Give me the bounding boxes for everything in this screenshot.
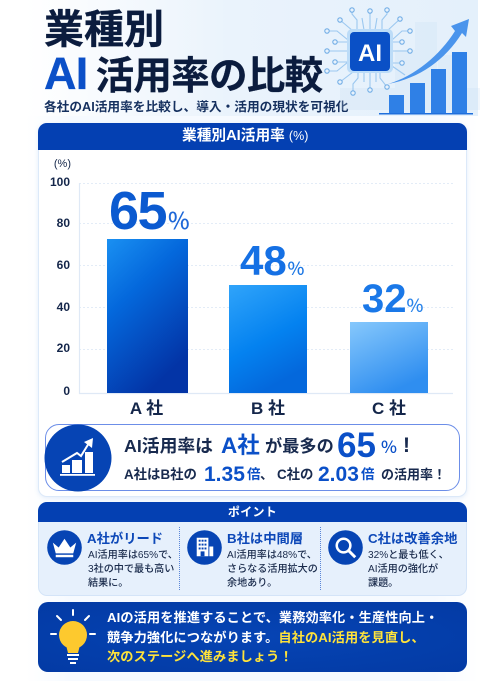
callout detail: 、 <box>260 467 273 482</box>
bar: C社 <box>350 277 428 418</box>
panel: conclusion banner <box>38 602 467 672</box>
callout headline <box>124 426 410 465</box>
y axis labels: 60 <box>57 258 70 272</box>
icon: crown <box>47 530 82 565</box>
callout detail: A社はB社の <box>124 467 197 482</box>
point: C社は改善余地: AI活用の強化が <box>368 564 438 575</box>
title <box>44 8 323 99</box>
point: C社は改善余地: 32%と最も低く、 <box>368 550 449 561</box>
callout headline: % <box>381 433 397 458</box>
bar: B社: B 社 <box>251 399 285 418</box>
icon: building <box>187 530 222 565</box>
conclusion text <box>107 610 438 664</box>
y axis labels: 100 <box>50 175 70 189</box>
icon: AI chip and rising bars: AI <box>358 40 382 67</box>
point: B社は中間層: さらなる活用拡大の <box>227 564 318 575</box>
bar chart <box>50 158 453 418</box>
chart heading: 業種別AI活用率 (%) <box>182 128 308 144</box>
icon: light bulb <box>50 609 96 664</box>
callout detail: 倍 <box>361 467 374 482</box>
point: B社は中間層: 余地あり。 <box>227 578 277 589</box>
chart heading <box>38 123 467 150</box>
callout headline: A社 <box>221 433 260 458</box>
header band <box>26 0 478 116</box>
point: C社は改善余地 <box>328 530 458 589</box>
icon: magnifier <box>328 530 363 565</box>
point: A社がリード: 結果に。 <box>88 578 128 589</box>
callout headline: ! <box>403 434 410 457</box>
callout detail: 倍 <box>247 467 260 482</box>
callout detail <box>124 463 446 486</box>
callout detail: 1.35 <box>204 463 245 486</box>
bar: A社: % <box>168 202 190 236</box>
bar: A社 <box>107 181 190 418</box>
conclusion text: 次のステージへ進みましょう！ <box>107 649 293 664</box>
title: 業種別 <box>44 8 164 52</box>
conclusion text: 競争力強化につながります。自社のAI活用を見直し、 <box>107 630 425 645</box>
conclusion text: AIの活用を推進することで、業務効率化・生産性向上・ <box>107 610 438 625</box>
point: A社がリード <box>47 530 178 589</box>
subtitle: 各社のAI活用率を比較し、導入・活用の現状を可視化 <box>44 100 348 114</box>
y axis labels: 0 <box>63 384 70 398</box>
bar: C社: % <box>406 292 424 318</box>
title: AI活用率の比較 <box>44 48 322 99</box>
point: A社がリード: AI活用率は65%で、 <box>88 550 178 561</box>
points heading: ポイント <box>228 505 277 519</box>
y axis labels: (%) <box>54 158 71 170</box>
bar: B社 <box>229 237 307 418</box>
point: B社は中間層 <box>187 530 318 589</box>
icon: growth chart circle <box>44 424 112 492</box>
callout detail: 2.03 <box>318 463 359 486</box>
y axis labels <box>50 158 71 398</box>
points heading <box>38 502 467 522</box>
callout headline: AI活用率は <box>124 436 213 456</box>
bar: A社: 65 <box>109 181 167 241</box>
point: B社は中間層: AI活用率は48%で、 <box>227 550 317 561</box>
bar: C社: C 社 <box>372 399 406 418</box>
callout detail: の活用率！ <box>381 467 446 482</box>
bar: A社: A 社 <box>130 399 163 418</box>
panel: points <box>38 502 467 596</box>
panel: bar chart card <box>38 123 467 497</box>
y axis labels: 40 <box>57 300 70 314</box>
bar: B社: % <box>288 255 304 281</box>
bar: B社: 48 <box>240 237 287 284</box>
y axis labels: 20 <box>57 341 70 355</box>
point: C社は改善余地: 課題。 <box>368 578 398 589</box>
callout headline: が最多の <box>265 436 334 456</box>
point: A社がリード: 3社の中で最も高い <box>88 564 174 575</box>
point: C社は改善余地: C社は改善余地 <box>368 531 457 546</box>
lower background <box>26 116 478 681</box>
bar: C社: 32 <box>362 277 406 321</box>
point: B社は中間層: B社は中間層 <box>227 531 303 546</box>
callout <box>45 424 460 491</box>
callout detail: C社の <box>277 467 313 482</box>
icon: AI chip and rising bars <box>324 7 480 114</box>
y axis labels: 80 <box>57 216 70 230</box>
point: A社がリード: A社がリード <box>87 531 163 546</box>
callout headline: 65 <box>337 426 376 465</box>
